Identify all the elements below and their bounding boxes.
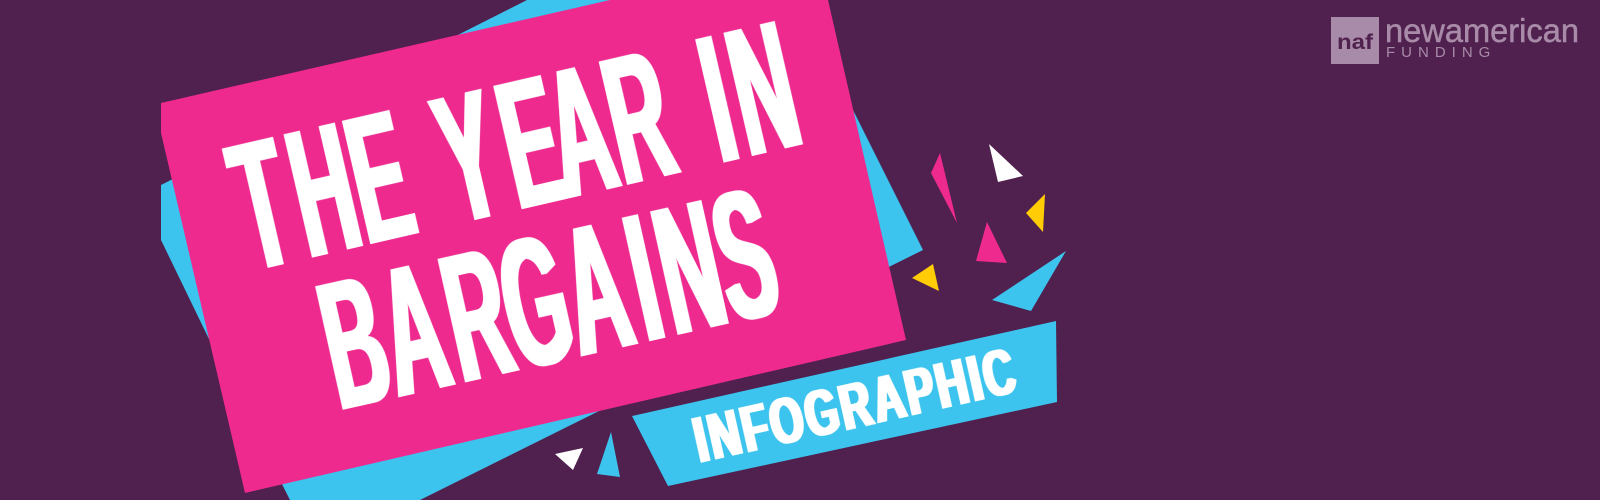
logo wordmark: newamerican <box>1385 12 1579 49</box>
title text: the year in bargains: THE <box>214 71 429 311</box>
title text: the year in bargains: YEAR <box>419 11 690 263</box>
title text: the year in bargains <box>214 0 815 450</box>
confetti triangles <box>555 144 1066 477</box>
infographic label: INFOGRAPHIC <box>687 333 1025 477</box>
blue backing panel <box>161 0 923 500</box>
logo square <box>1331 17 1379 64</box>
pink title panel <box>161 0 906 493</box>
logo subline: FUNDING <box>1386 44 1496 61</box>
logo: new american funding <box>1331 12 1579 64</box>
logo monogram: naf <box>1337 31 1374 54</box>
title text: the year in bargains: BARGAINS <box>304 149 794 450</box>
infographic banner <box>632 321 1057 486</box>
